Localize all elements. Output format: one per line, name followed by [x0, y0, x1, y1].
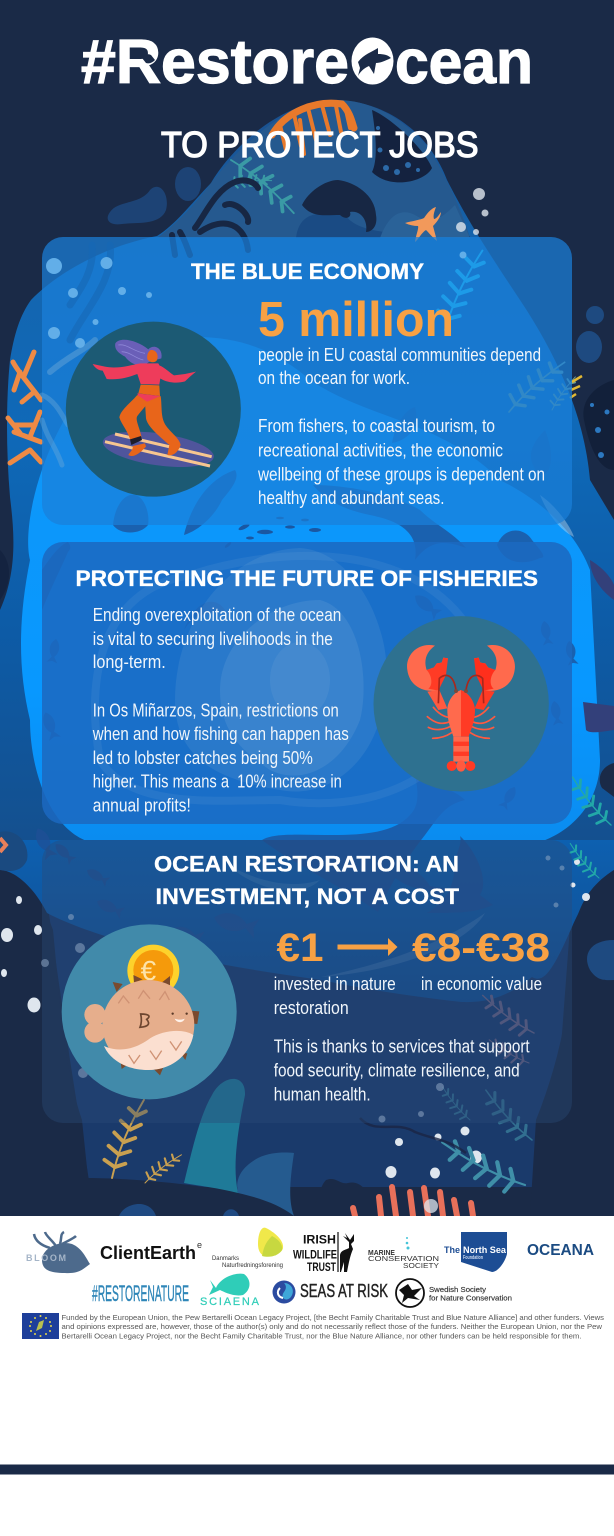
starfish: [405, 207, 441, 242]
text: funding disclaimer: Bertarelli Ocean Legacy Project, nor the Becht Family Charitable Trust, nor the Blue Nature Alliance, nor other funders can be held responsible for them.: [62, 1332, 582, 1340]
logo: Irish Wildlife Trust: TRUST: [307, 1260, 336, 1274]
text: blue economy body: people in EU coastal communities depend: [258, 345, 541, 365]
background: ocean scene: [0, 0, 614, 1216]
bubbles in blue economy panel: [46, 252, 466, 348]
text: fisheries body: higher. This means a 10% increase in: [93, 772, 342, 792]
text: funding disclaimer: Funded by the European Union, the Pew Bertarelli Ocean Legacy Project, [the Becht Family Charitable Trust and Blue Nature Alliance] and other funders. Views: [62, 1313, 604, 1322]
bubbles in restoration panel: [41, 856, 564, 1122]
logo: Swedish Society for Nature Conservation: for Nature Conservation: [429, 1294, 512, 1302]
seaweed and coral: sides and bottom: [8, 347, 614, 1216]
logo: Seas At Risk: SEAS AT RISK: [300, 1281, 388, 1301]
icon: pufferfish with coin: €: [141, 955, 157, 986]
text: fisheries body: [92, 605, 349, 816]
logo: Danmarks Naturfredningsforening: Danmarks: [212, 1255, 240, 1262]
heading: the blue economy: THE BLUE ECONOMY: [191, 259, 424, 284]
logo: Sciaena: [200, 1274, 260, 1308]
title: [81, 28, 533, 97]
text: fisheries body: is vital to securing livelihoods in the: [93, 629, 333, 649]
text: restoration body: restoration: [274, 998, 349, 1018]
text: fisheries body: long-term.: [93, 652, 166, 672]
seaweed bands in blue economy panel: [42, 245, 484, 465]
text: blue economy body: wellbeing of these groups is dependent on: [257, 464, 545, 484]
text: funding disclaimer: [62, 1313, 604, 1340]
stat: euro return: €1: [276, 926, 324, 970]
logo: Bloom: BLOOM: [26, 1253, 66, 1263]
title: cean: [395, 28, 533, 97]
stat: euro return: [276, 926, 550, 970]
text: restoration body: invested in nature: [274, 974, 396, 994]
icon: EU flag: [22, 1313, 59, 1339]
logo: North Sea Foundation: [444, 1232, 507, 1272]
text: fisheries body: Ending overexploitation of the ocean: [93, 605, 341, 625]
title: O: [353, 28, 392, 97]
logo: North Sea Foundation: Foundation: [463, 1255, 483, 1261]
text: blue economy body: recreational activities, the economic: [258, 440, 503, 460]
subtitle: TO PROTECT JOBS: [161, 124, 478, 165]
text: blue economy body: on the ocean for work.: [258, 368, 410, 388]
panel: ocean restoration: [42, 840, 572, 1123]
heading: ocean restoration: INVESTMENT, NOT A COST: [156, 884, 460, 909]
logo: Swedish Society for Nature Conservation: [396, 1279, 512, 1307]
logo: Marine Conservation Society: SOCIETY: [403, 1261, 439, 1270]
logo: Seas At Risk: [272, 1280, 388, 1304]
text: funding disclaimer: and opinions expressed are, however, those of the author(s) only and do not necessarily reflect those of the funders. Neither the European Union, nor the Pew: [62, 1322, 603, 1331]
logo: ClientEarth: ClientEarth: [100, 1242, 196, 1263]
concentric swirl inside fisheries panel: [95, 548, 470, 803]
text: blue economy body: From fishers, to coastal tourism, to: [258, 416, 495, 436]
logo: Irish Wildlife Trust: [293, 1232, 354, 1274]
logo: Irish Wildlife Trust: IRISH: [303, 1232, 336, 1246]
logo: Marine Conservation Society: MARINE: [368, 1248, 395, 1257]
text: restoration body: This is thanks to services that support: [274, 1036, 530, 1056]
coral: dark dotted blob: [372, 110, 432, 182]
stat: euro return: €8-€38: [412, 926, 550, 970]
text: restoration body: human health.: [274, 1084, 371, 1104]
icon: surfer: [66, 322, 241, 497]
icon: lobster: [373, 616, 549, 791]
bubbles: [1, 188, 590, 1178]
logo: North Sea Foundation: The: [444, 1245, 460, 1256]
logo: Swedish Society for Nature Conservation: Swedish Society: [429, 1285, 486, 1294]
logo: Marine Conservation Society: [368, 1237, 439, 1270]
logo: Irish Wildlife Trust: WILDLIFE: [293, 1248, 337, 1262]
footer: white partner area: [0, 1216, 614, 1536]
coral: orange top: [272, 103, 354, 154]
text: blue economy body: [257, 345, 545, 508]
heading: ocean restoration: [154, 852, 460, 909]
light whale streaks: [228, 495, 574, 977]
heading: protecting the future of fisheries: PROTECTING THE FUTURE OF FISHERIES: [76, 566, 538, 591]
logo: ClientEarth: e: [197, 1240, 202, 1250]
panel: protecting fisheries: [42, 542, 572, 824]
text: fisheries body: In Os Miñarzos, Spain, restrictions on: [93, 700, 339, 720]
fern: teal top: [221, 154, 305, 215]
text: fisheries body: when and how fishing can happen has: [92, 724, 349, 744]
text: restoration body: food security, climate resilience, and: [274, 1060, 520, 1080]
text: restoration body: in economic value: [421, 974, 542, 994]
school of small fish: [224, 517, 321, 549]
text: fisheries body: led to lobster catches being 50%: [93, 748, 313, 768]
logo: Marine Conservation Society: CONSERVATION: [368, 1254, 439, 1263]
logo: Danmarks Naturfredningsforening: Naturfredningsforening: [222, 1262, 283, 1269]
icon: pufferfish with coin: [62, 924, 237, 1099]
title: #Restore: [81, 28, 349, 97]
text: restoration body: [274, 974, 542, 1104]
octopus silhouette: [172, 180, 258, 255]
text: fisheries body: annual profits!: [93, 796, 191, 816]
logo: Bloom: [26, 1232, 90, 1273]
logo: Sciaena: SCIAENA: [200, 1296, 260, 1308]
panel: the blue economy: [42, 237, 572, 525]
footer band: [0, 1464, 614, 1474]
fish silhouette large: [302, 180, 376, 232]
heading: ocean restoration: OCEAN RESTORATION: AN: [154, 852, 459, 876]
text: blue economy body: healthy and abundant seas.: [258, 488, 444, 508]
logo: Oceana: OCEANA: [527, 1242, 594, 1259]
logo: Danmarks Naturfredningsforening: [212, 1228, 283, 1269]
marine silhouettes: [31, 407, 579, 946]
text: #RESTORENATURE: [92, 1281, 189, 1306]
logo: North Sea Foundation: North Sea: [463, 1245, 507, 1256]
stat: 5 million: 5 million: [258, 293, 454, 347]
